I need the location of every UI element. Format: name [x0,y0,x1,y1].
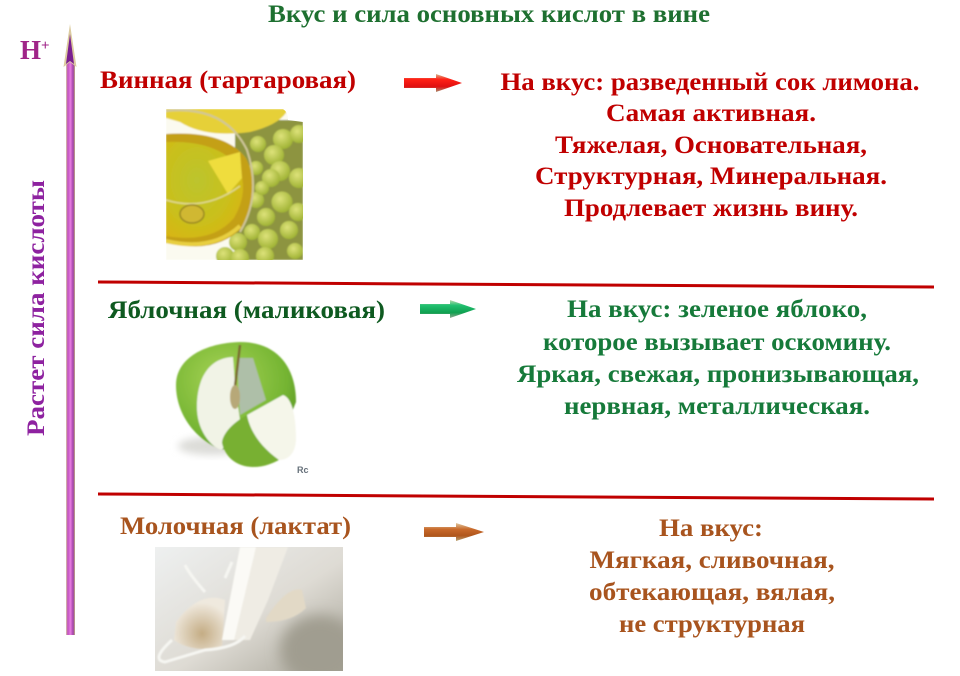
tartaric description: Продлевает жизнь вину. [564,193,858,222]
tartaric heading: Винная (тартаровая) [100,65,356,94]
axis label: Растет сила кислоты [21,180,50,436]
hydrogen ion label: + [41,38,50,54]
tartaric description: Самая активная. [606,98,816,127]
divider one [98,282,934,287]
malic description: Яркая, свежая, пронизывающая, [517,359,919,388]
lactic description [589,513,835,638]
panel: lactic acid [120,511,835,676]
divider two [98,494,934,499]
icon: red arrow [404,74,462,92]
picture: milk splash [155,547,343,671]
lactic description: На вкус: [659,513,763,542]
picture: wine glass and grapes [166,109,309,267]
malic description: которое вызывает оскомину. [543,327,891,356]
tartaric description: Структурная, Минеральная. [535,161,887,190]
panel: malic acid [108,294,919,475]
malic heading: Яблочная (маликовая) [108,295,385,324]
malic description: На вкус: зеленое яблоко, [567,294,867,323]
icon: brown arrow [424,523,484,541]
lactic description: обтекающая, вялая, [589,577,835,606]
watermark text: Rc [297,465,309,475]
lactic description: Мягкая, сливочная, [590,545,834,574]
tartaric description [500,67,920,222]
hydrogen ion label: H [20,35,41,65]
vertical arrow: acidity strength [64,24,76,635]
lactic description: не структурная [619,609,805,638]
malic description [517,294,919,420]
panel: tartaric acid [100,65,920,267]
icon: green arrow [420,300,476,318]
tartaric description: Тяжелая, Основательная, [555,130,867,159]
tartaric description: На вкус: разведенный сок лимона. [500,67,920,96]
malic description: нервная, металлическая. [564,391,870,420]
lactic heading: Молочная (лактат) [120,511,351,540]
picture: green apple [176,342,309,475]
